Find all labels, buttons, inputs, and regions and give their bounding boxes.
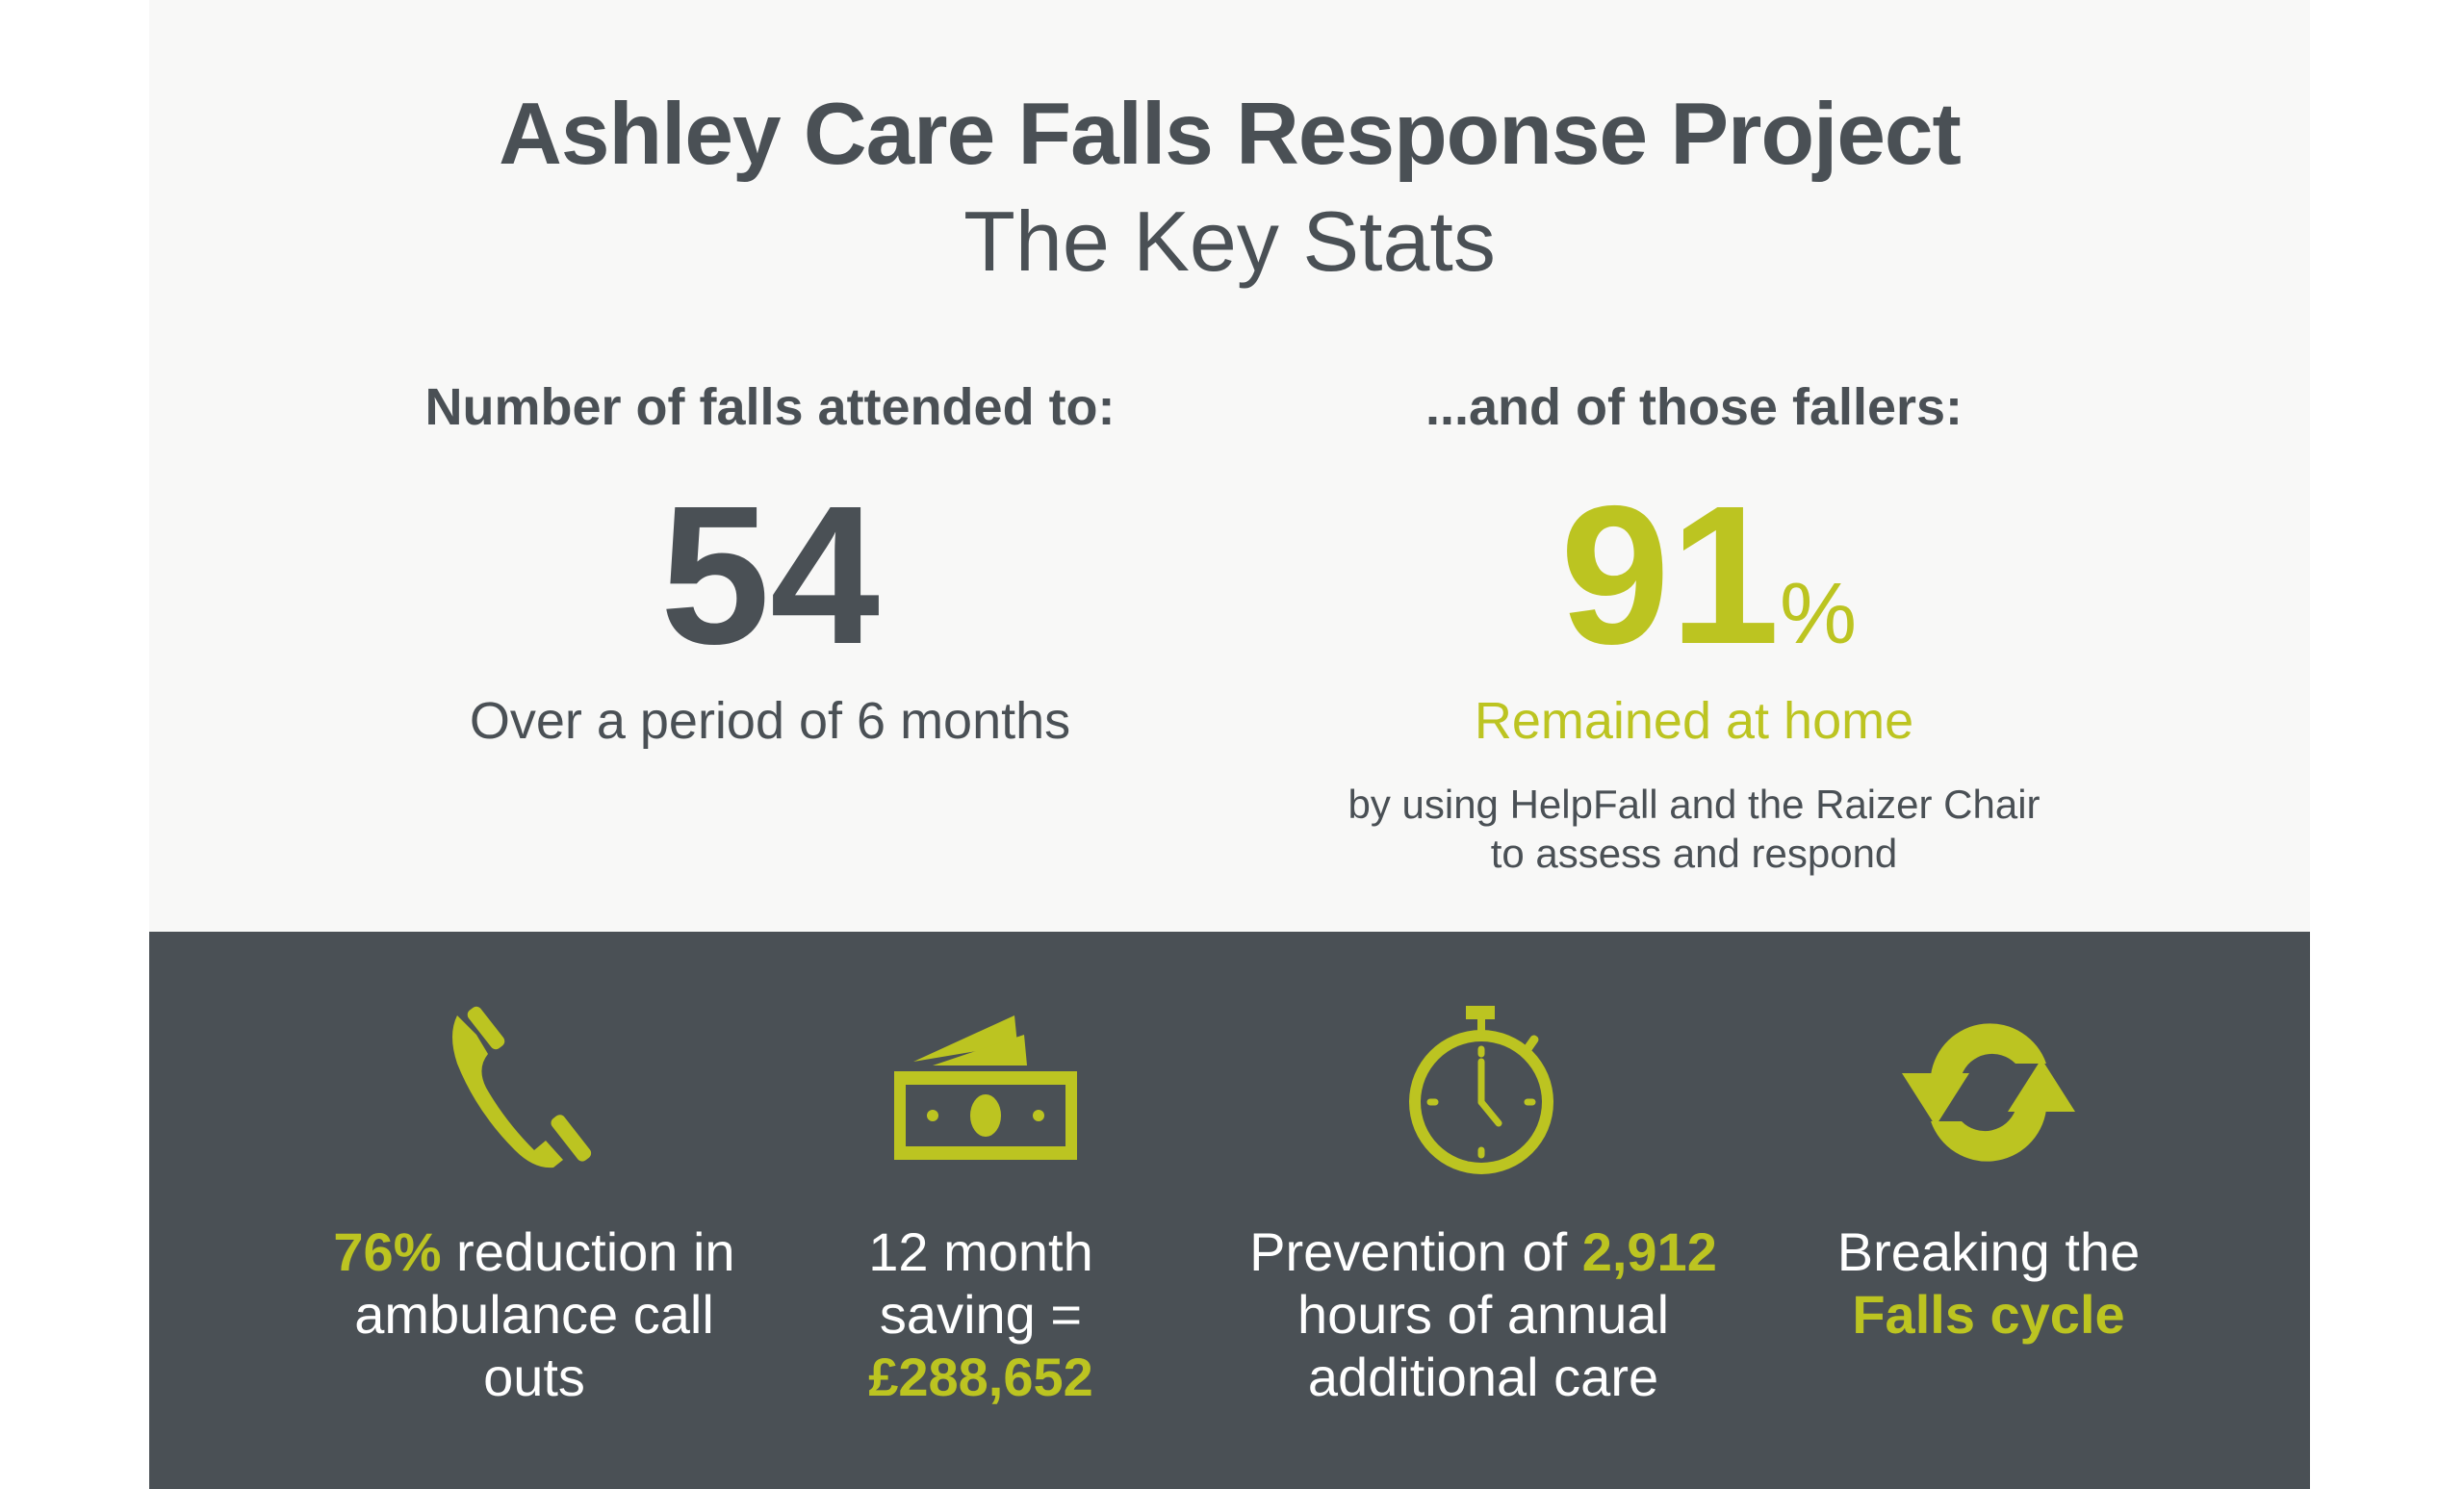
icon: phone bbox=[452, 1007, 591, 1168]
text: falls cycle bbox=[1837, 1221, 2140, 1345]
text: prevention: Prevention of 2,912 bbox=[1249, 1221, 1717, 1282]
caption detail: by using HelpFall and the Raizer Chair bbox=[1348, 782, 2040, 827]
caption green: Remained at home bbox=[1475, 692, 1913, 750]
subtitle: The Key Stats bbox=[963, 193, 1496, 289]
text: prevention bbox=[1249, 1221, 1717, 1407]
number 54: 54 bbox=[660, 465, 880, 685]
stat: falls attended bbox=[424, 378, 1116, 750]
heading: falls: Number of falls attended to: bbox=[424, 378, 1116, 436]
title: Ashley Care Falls Response Project bbox=[499, 86, 1961, 183]
caption detail: to assess and respond bbox=[1491, 831, 1897, 876]
panel: bottom band bbox=[149, 932, 2310, 1489]
text: ambulance: outs bbox=[483, 1347, 585, 1407]
text: saving: saving = bbox=[880, 1284, 1082, 1345]
caption: Over a period of 6 months bbox=[470, 692, 1070, 750]
text: falls cycle: Falls cycle bbox=[1852, 1284, 2125, 1345]
text: saving: £288,652 bbox=[868, 1347, 1093, 1407]
caption detail bbox=[1348, 782, 2040, 876]
text: saving bbox=[868, 1221, 1093, 1407]
text: ambulance bbox=[333, 1221, 735, 1407]
icon: cycle bbox=[1902, 1023, 2075, 1162]
text: prevention: hours of annual bbox=[1297, 1284, 1669, 1345]
icon: money bbox=[894, 1015, 1077, 1160]
number 91%: 91% bbox=[1560, 465, 1857, 685]
text: prevention: additional care bbox=[1308, 1347, 1658, 1407]
text: ambulance: ambulance call bbox=[354, 1284, 714, 1345]
text: falls cycle: Breaking the bbox=[1837, 1221, 2140, 1282]
text: saving: 12 month bbox=[868, 1221, 1093, 1282]
stat: remained at home bbox=[1348, 378, 2040, 876]
heading: fallers: ...and of those fallers: bbox=[1425, 378, 1963, 436]
icon: stopwatch bbox=[1409, 1006, 1553, 1174]
panel: top stats bbox=[149, 0, 2310, 932]
text: ambulance: 76% reduction in bbox=[333, 1221, 735, 1282]
